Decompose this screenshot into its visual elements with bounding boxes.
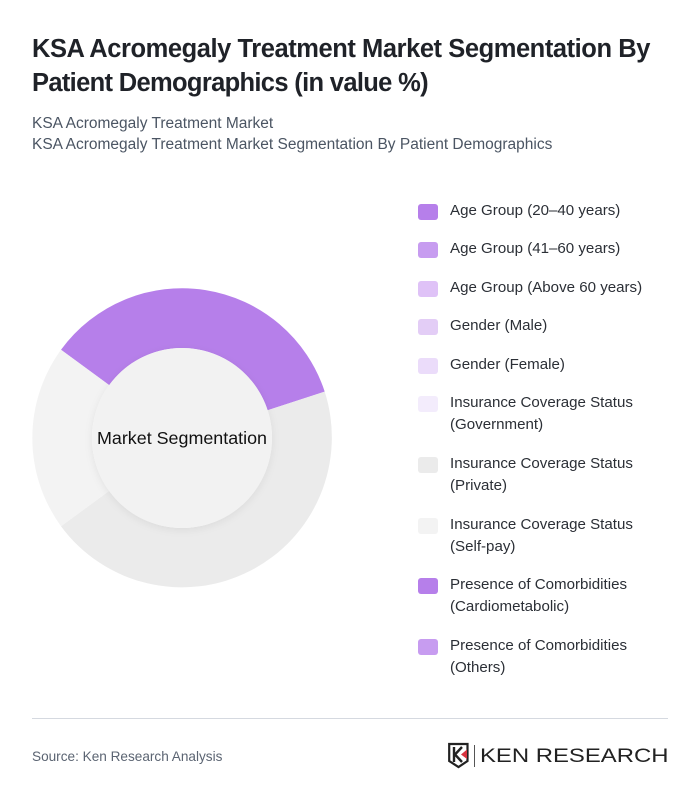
legend item: age 20-40 [418,202,620,220]
centre label: Market Segmentation [97,428,267,448]
legend [418,202,642,676]
icon: shield K [448,742,469,768]
title [32,35,650,97]
subtitle [32,115,552,153]
segment: insurance private [61,392,332,587]
legend: Age Group (Above 60 years) [450,279,642,296]
legend: Age Group (20–40 years) [450,202,620,219]
donut centre [92,348,272,528]
legend: Age Group (41–60 years) [450,240,620,257]
legend: Presence of Comorbidities [450,576,627,593]
legend item: private [418,455,633,494]
legend: Insurance Coverage Status [450,394,633,411]
title: Patient Demographics (in value %) [32,69,428,97]
legend item: age above 60 [418,279,642,297]
legend item: others [418,637,627,676]
legend: Gender (Male) [450,317,547,334]
legend: (Others) [450,659,505,676]
segment: age and gender [61,288,325,410]
legend: (Private) [450,477,507,494]
wordmark: KEN RESEARCH [480,745,668,767]
legend: (Government) [450,416,543,433]
legend: Gender (Female) [450,356,565,373]
legend item: self-pay [418,516,633,555]
legend: Insurance Coverage Status [450,455,633,472]
legend item: age 41-60 [418,240,620,258]
legend item: government [418,394,633,433]
legend item: female [418,356,565,374]
legend: (Self-pay) [450,538,515,555]
legend: (Cardiometabolic) [450,598,569,615]
subtitle: KSA Acromegaly Treatment Market [32,115,273,132]
segment: insurance self-pay [32,350,109,526]
logo: Ken Research [448,742,668,768]
subtitle: KSA Acromegaly Treatment Market Segmentation By Patient Demographics [32,136,552,153]
legend item: cardiometabolic [418,576,627,615]
legend: Presence of Comorbidities [450,637,627,654]
title: KSA Acromegaly Treatment Market Segmentation By [32,35,650,63]
source note: Source: Ken Research Analysis [32,749,222,764]
legend item: male [418,317,547,335]
legend: Insurance Coverage Status [450,516,633,533]
